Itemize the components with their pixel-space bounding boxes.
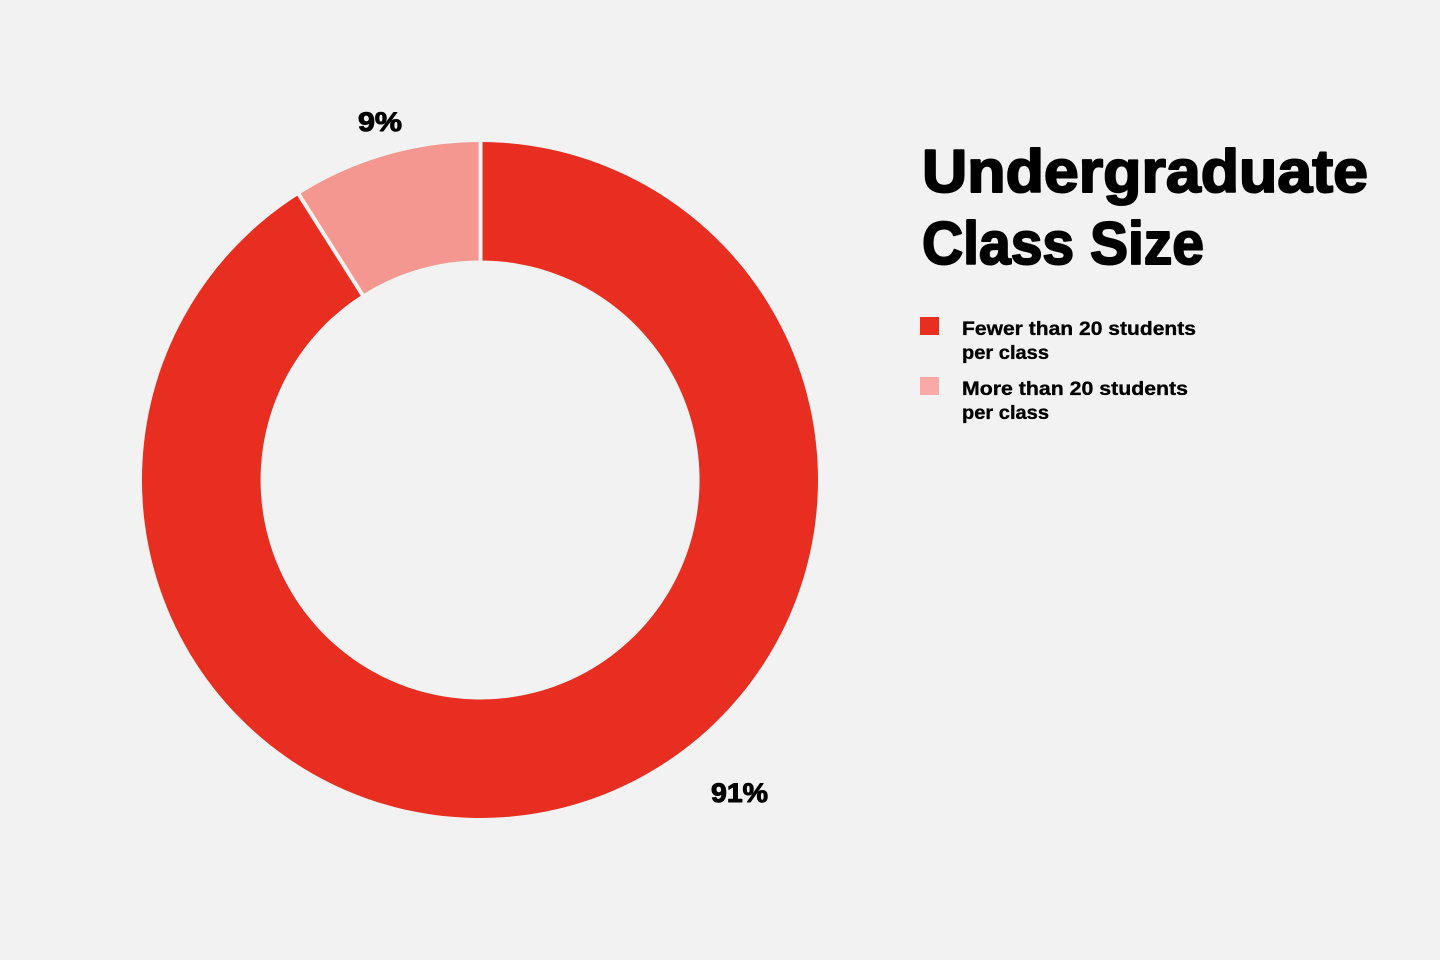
legend item: more than 20 students: More than 20 students <box>962 378 1188 400</box>
donut chart <box>142 141 818 818</box>
data label: 91%: 91% <box>711 778 768 808</box>
legend item: fewer than 20 students: Fewer than 20 students <box>962 318 1196 340</box>
legend item: fewer than 20 students: per class <box>962 342 1049 364</box>
segment: 9% more than 20 students <box>299 142 480 295</box>
legend item: more than 20 students <box>920 377 1188 424</box>
title: Undergraduate <box>922 138 1368 205</box>
legend item: fewer than 20 students <box>920 317 1196 364</box>
data label: 9%: 9% <box>358 107 402 137</box>
segment separators <box>299 141 480 295</box>
legend <box>920 317 1196 424</box>
legend item: more than 20 students: per class <box>962 402 1049 424</box>
segment: 91% fewer than 20 students <box>142 142 818 818</box>
title: Class Size <box>922 210 1204 277</box>
title <box>922 138 1368 277</box>
